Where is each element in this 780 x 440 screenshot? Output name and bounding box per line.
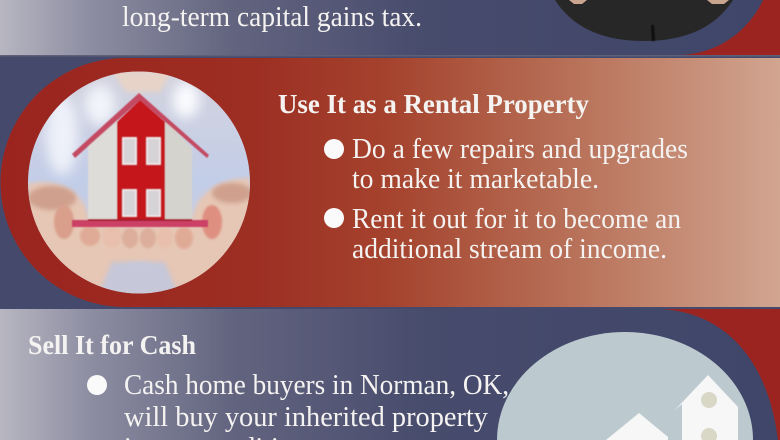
bullet: rent it out — [324, 204, 681, 265]
model house large — [674, 375, 738, 440]
bullet: repairs and upgrades: Do a few repairs and upgrades — [352, 134, 688, 165]
photo: person in dark suit — [555, 0, 733, 41]
heading: use it as a rental property: Use It as a Rental Property — [278, 89, 589, 119]
panel: capital gains tax section — [0, 0, 780, 55]
photo: white model houses on grey — [495, 332, 755, 440]
model house small — [606, 413, 668, 440]
panel: sell it for cash — [0, 309, 780, 440]
model house — [72, 93, 209, 227]
bullet: repairs and upgrades — [324, 134, 688, 195]
bullet: cash home buyers: will buy your inherited property — [124, 402, 488, 433]
bullet: cash home buyers — [87, 370, 509, 440]
hands — [28, 178, 252, 294]
bullet: cash home buyers: Cash home buyers in Norman, OK, — [124, 370, 509, 401]
panel: use it as a rental property — [0, 55, 780, 309]
bullet: repairs and upgrades: to make it marketable. — [352, 164, 599, 195]
text: long-term capital gains tax: long-term capital gains tax. — [122, 2, 422, 33]
heading: sell it for cash: Sell It for Cash — [28, 330, 196, 360]
bullet: rent it out: Rent it out for it to become an — [352, 204, 681, 235]
photo: hands holding a model house — [28, 71, 252, 294]
bullet: rent it out: additional stream of income. — [352, 234, 667, 265]
